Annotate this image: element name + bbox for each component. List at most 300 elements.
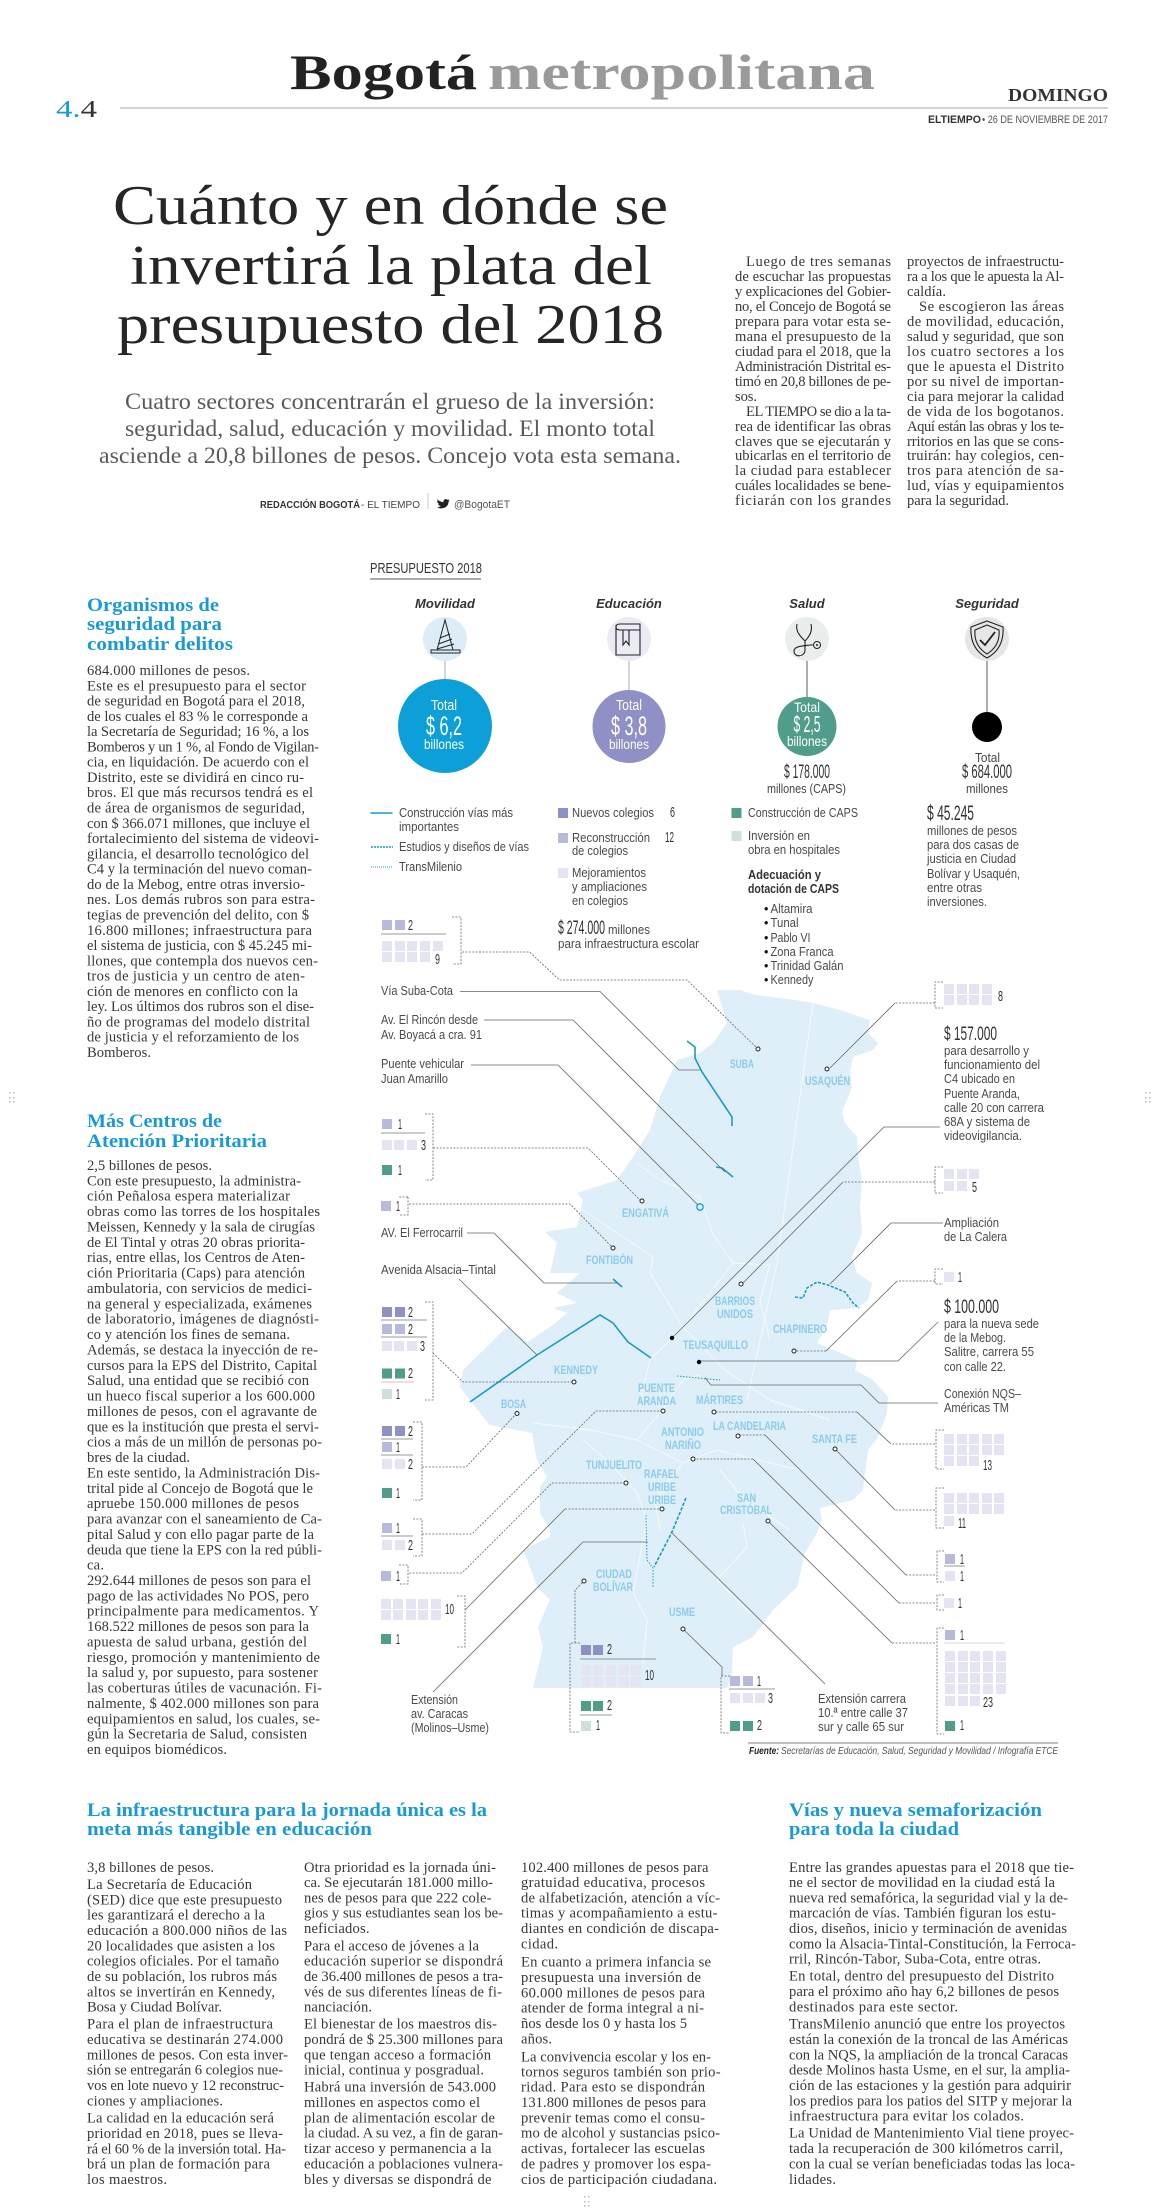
legend: educación: de colegios: [572, 844, 628, 858]
text: 1: [958, 1595, 962, 1612]
body text: apruebe 150.000 millones de pesos: [87, 1496, 299, 1512]
day label: DOMINGO: [1008, 85, 1108, 105]
callout: Usme: 1: [757, 1673, 761, 1690]
heading: Más Centros de: [87, 1111, 222, 1132]
body text: fortalecimiento del sistema de videovi-: [87, 831, 319, 847]
column 3: atender de forma integral a ni-: [521, 2001, 704, 2017]
heading: Vías y nueva semaforización: [789, 1800, 1042, 1821]
column 3: 131.800 millones de pesos para: [521, 2095, 707, 2111]
body text: rias, entre ellas, los Centros de Aten-: [87, 1250, 305, 1266]
legend: salud: [732, 806, 858, 987]
body text: co y atención los fines de semana.: [87, 1327, 290, 1343]
intro column 1: [735, 254, 892, 509]
intro column 2: salud y seguridad, que son: [907, 329, 1065, 345]
body text: Bomberos y un 1 %, al Fondo de Vigilan-: [87, 739, 319, 755]
body text: ley. Los últimos dos rubros son el dise-: [87, 999, 314, 1015]
callout: Puente Aranda: 2: [408, 1537, 413, 1554]
total bubble: $ 3,8: [611, 711, 647, 741]
column 3: prevenir temas como el consu-: [521, 2110, 705, 2126]
body text: ción Peñalosa espera materializar: [87, 1189, 290, 1205]
sector: Educación: [592, 596, 666, 763]
column 3: ños desde los 0 y hasta los 5: [521, 2016, 687, 2032]
text: 1: [958, 1269, 962, 1286]
intro column 1: sos.: [735, 389, 757, 405]
column 2: El bienestar de los maestros dis-: [304, 2017, 497, 2033]
callout: Bosa: 1: [396, 1485, 400, 1502]
source credit: Secretarías de Educación, Salud, Seguridad y Movilidad / Infografía ETCE: [781, 1746, 1058, 1757]
locality labels: CIUDAD: [596, 1569, 632, 1581]
legend: educación: Nuevos colegios: [572, 806, 654, 820]
callout: $157.000 C4: para desarrollo y: [944, 1044, 1030, 1058]
intro column 2: para la seguridad.: [907, 493, 1009, 509]
callout: Engativá: [381, 1114, 644, 1203]
CAPS list: Altamira: [770, 902, 812, 916]
intro column 1: rea de identificar las obras: [735, 419, 891, 435]
callout: Bosa: 2: [408, 1456, 413, 1473]
callout: $157.000 C4: Puente Aranda,: [944, 1087, 1020, 1101]
intro column 2: ra a los que le apuesta la Al-: [907, 269, 1064, 285]
body text: nueva red semafórica, la seguridad vial y la de-: [789, 1890, 1068, 1906]
callout: La Candelaria: 1: [960, 1551, 964, 1568]
intro column 2: rritorios en las que se cons-: [907, 434, 1064, 450]
callout: San Cristóbal: 1: [960, 1717, 964, 1734]
icon: traffic cone: [423, 617, 467, 661]
callout: Ampliación de La Calera: [830, 1216, 1007, 1284]
body text: tada la recuperación de 300 kilómetros carril,: [789, 2141, 1063, 2157]
column 2: vés de sus diferentes líneas de fi-: [304, 1984, 502, 2000]
legend: seguridad: inversiones.: [927, 895, 987, 909]
callout: San Cristóbal: [766, 1519, 1006, 1734]
callout: La Candelaria: 1: [960, 1568, 964, 1585]
callout: Kennedy: [381, 1302, 576, 1403]
column 3: 60.000 millones de pesos para: [521, 1985, 706, 2001]
legend: movilidad: [370, 806, 529, 874]
body text: obras como las torres de los hospitales: [87, 1204, 320, 1220]
locality labels: NARIÑO: [665, 1439, 701, 1452]
column 2: bles y diversas se dispondrá de: [304, 2172, 492, 2188]
callout: Barrios Unidos: 5: [972, 1179, 977, 1196]
panel: movilidad article: [789, 1800, 1076, 2188]
CAPS list: Tunal: [770, 916, 798, 930]
legend: salud: obra en hospitales: [748, 843, 840, 857]
panel: Más Centros de Atención Prioritaria: [87, 1111, 322, 1758]
locality labels: BARRIOS: [715, 1296, 755, 1308]
locality labels: [501, 1059, 857, 1619]
callout: San Cristóbal: 23: [983, 1694, 993, 1711]
callout: Usaquén: [825, 982, 1003, 1071]
body text: como la Alsacia-Tintal-Constitución, la Ferroca-: [789, 1936, 1076, 1952]
byline: [260, 493, 510, 511]
total amount: $ 684.000: [962, 762, 1012, 783]
callout: Ciudad Bolívar: 2: [607, 1641, 612, 1658]
body text: de área de organismos de seguridad,: [87, 800, 305, 816]
column 3: [521, 1860, 721, 2188]
total bubble: [398, 679, 492, 773]
callout: Extensión carrera 10: sur y calle 65 sur: [818, 1720, 904, 1734]
locality labels: USAQUÉN: [805, 1075, 850, 1088]
intro column 2: caldía.: [907, 284, 946, 300]
locality labels: URIBE: [648, 1482, 676, 1494]
callout: Engativá: 1: [398, 1162, 402, 1179]
locality labels: BOSA: [501, 1399, 526, 1411]
intro column 1: y explicaciones del Gobier-: [735, 284, 891, 300]
column 1: brá un plan de formación para: [87, 2157, 271, 2173]
CAPS amount: millones (CAPS): [767, 782, 846, 796]
locality labels: FONTIBÓN: [586, 1254, 633, 1267]
callout: Puente vehicular Juan Amarillo: Puente vehicular: [381, 1057, 464, 1071]
callout: Av. El Rincón: Av. El Rincón desde: [381, 1013, 478, 1027]
callout: Ciudad Bolívar: 2: [607, 1697, 612, 1714]
locality labels: SANTA FE: [812, 1434, 857, 1446]
column 1: 3,8 billones de pesos.: [87, 1860, 214, 1876]
panel: Organismos de seguridad: [87, 595, 319, 1061]
section title: metropolitana: [488, 44, 875, 100]
callout: San Cristóbal: 1: [960, 1627, 964, 1644]
body text: apuesta de salud urbana, gestión del: [87, 1634, 307, 1650]
legend: seguridad: millones de pesos: [927, 824, 1017, 838]
callout: $100.000 Mebog: de la Mebog.: [944, 1331, 1006, 1345]
body text: pago de las actividades No POS, pero: [87, 1588, 309, 1604]
column 2: educación superior se dispondrá: [304, 1954, 504, 1970]
column 1: altos se invertirán en Kennedy,: [87, 1984, 275, 2000]
column 3: activas, fortalecer las escuelas: [521, 2141, 705, 2157]
date line: [928, 114, 1108, 126]
locality labels: RAFAEL: [644, 1469, 679, 1481]
callout: Mártires: [712, 1410, 1004, 1474]
callout: Fontibón: [381, 1197, 615, 1250]
infrastructure amount: [558, 918, 699, 951]
heading: meta más tangible en educación: [87, 1819, 372, 1840]
icon: stethoscope: [785, 617, 829, 661]
column 2: educación a poblaciones vulnera-: [304, 2156, 503, 2172]
heading: combatir delitos: [87, 634, 233, 655]
body text: tros de justicia y un centro de aten-: [87, 969, 305, 985]
intro column 2: de movilidad, educación,: [907, 314, 1064, 330]
intro column 2: truirán: hay colegios, cen-: [907, 448, 1064, 464]
body text: 2,5 billones de pesos.: [87, 1158, 212, 1174]
locality labels: URIBE: [648, 1495, 676, 1507]
body text: con la cual se verían beneficiadas todas las loca-: [789, 2156, 1075, 2172]
infrastructure amount: para infraestructura escolar: [558, 937, 699, 951]
locality labels: PUENTE: [638, 1383, 675, 1395]
total bubble: billones: [787, 733, 827, 749]
column 3: 102.400 millones de pesos para: [521, 1860, 709, 1876]
body text: ca.: [87, 1558, 104, 1574]
legend: seguridad: justicia en Ciudad: [926, 852, 1016, 866]
total amount: Total: [975, 750, 1000, 765]
intro column 1: timó en 20,8 billones de pe-: [735, 374, 891, 390]
callout: $100.000 Mebog: Salitre, carrera 55: [944, 1345, 1034, 1359]
total amount: millones: [966, 782, 1008, 796]
intro text columns: [735, 254, 1065, 509]
callout: Rafael Uribe Uribe: 1: [396, 1631, 400, 1648]
callout: Conexión NQS-Américas TM: Conexión NQS–: [944, 1387, 1021, 1401]
callout: Ampliación de La Calera: Ampliación: [944, 1216, 999, 1230]
callout: $157.000 C4: videovigilancia.: [944, 1129, 1022, 1143]
main title: Cuánto y en dónde se: [113, 175, 668, 237]
body text: ción Prioritaria (Caps) para atención: [87, 1266, 306, 1282]
panel: budget header and sector columns: [370, 560, 1020, 796]
locality labels: ANTONIO: [661, 1427, 704, 1439]
legend: educación: y ampliaciones: [572, 880, 647, 894]
callout: $157.000 C4: [670, 1024, 1044, 1340]
body text: un hueco fiscal superior a los 600.000: [87, 1389, 315, 1405]
intro column 2: por su nivel de importan-: [907, 374, 1064, 390]
CAPS list: Pablo VI: [770, 931, 810, 945]
body text: nes. Los demás rubros son para estra-: [87, 892, 315, 908]
column 2: nanciación.: [304, 2000, 372, 2016]
locality labels: MÁRTIRES: [696, 1394, 743, 1407]
body text: destinados para este sector.: [789, 1999, 958, 2015]
total bubble: $ 6,2: [426, 711, 462, 741]
heading: Organismos de: [87, 595, 219, 616]
body text: de justicia y el reforzamiento de los: [87, 1030, 299, 1046]
total bubble: billones: [609, 736, 649, 752]
locality labels: CHAPINERO: [773, 1324, 827, 1336]
heading: [87, 1111, 268, 1152]
callout: Rafael Uribe Uribe: 10: [445, 1601, 454, 1618]
callout: Extensión av. Caracas: av. Caracas: [411, 1707, 468, 1721]
callout: Antonio Nariño: [691, 1457, 962, 1612]
callout: Tunjuelito: [381, 1481, 628, 1585]
legend: educación: Reconstrucción: [572, 831, 650, 845]
callout: Usaquén: 8: [998, 988, 1003, 1005]
intro column 2: tros para atención de sa-: [907, 463, 1064, 479]
callout: $100.000 Mebog: [697, 1297, 1039, 1374]
column 2: ca. Se ejecutarán 181.000 millo-: [304, 1875, 493, 1891]
callout: $100.000 Mebog: con calle 22.: [944, 1360, 1006, 1374]
body text: lidades.: [789, 2172, 836, 2188]
column 1: La Secretaría de Educación: [87, 1877, 253, 1893]
callout: Suba: [381, 917, 760, 1051]
callout: Mártires: 13: [983, 1457, 992, 1474]
body text: [789, 1860, 1076, 2188]
body text: cios a más de un millón de personas po-: [87, 1435, 322, 1451]
map of Bogotá: [460, 990, 888, 1688]
callout: Suba: 9: [435, 951, 440, 968]
body text: ne el sector de movilidad en la ciudad está la: [789, 1875, 1056, 1891]
CAPS list: •: [764, 973, 768, 987]
legend: seguridad: Bolívar y Usaquén,: [927, 867, 1020, 881]
body text: gún la Secretaria de Salud, consisten: [87, 1727, 308, 1743]
body text: na general y especializada, exámenes: [87, 1296, 312, 1312]
total amount: [962, 750, 1012, 796]
column 1: colegios oficiales. Por el tamaño: [87, 1954, 279, 1970]
intro column 1: ficiarán con los grandes: [735, 493, 891, 509]
body text: ño de programas del modelo distrital: [87, 1014, 310, 1030]
column 3: En cuanto a primera infancia se: [521, 1955, 711, 1971]
section title: Bogotá: [290, 44, 477, 100]
legend: educación: [558, 804, 699, 951]
intro column 2: Se escogieron las áreas: [919, 299, 1064, 315]
legend: movilidad: Construcción vías más: [399, 806, 513, 820]
legend: movilidad: TransMilenio: [399, 860, 462, 874]
legend: salud: Inversión en: [748, 829, 810, 843]
body text: en equipos biomédicos.: [87, 1742, 227, 1758]
body text: las coberturas útiles de vacunación. Fi-: [87, 1681, 322, 1697]
body text: tegias de prevención del delito, con $: [87, 908, 309, 924]
total bubble: Total: [431, 697, 457, 714]
source credit: Fuente:: [749, 1746, 779, 1757]
callout: $100.000 Mebog: $ 100.000: [944, 1297, 999, 1318]
icon: book: [607, 617, 651, 661]
CAPS list: •: [764, 916, 768, 930]
intro column 1: no, el Concejo de Bogotá se: [735, 299, 891, 315]
column 2: neficiados.: [304, 1921, 370, 1937]
column 1: 20 localidades que asisten a los: [87, 1938, 275, 1954]
body text: Meissen, Kennedy y la sala de cirugías: [87, 1220, 315, 1236]
heading: Atención Prioritaria: [87, 1131, 268, 1152]
column 2: tizar acceso y permanencia a la: [304, 2141, 492, 2157]
CAPS list: •: [764, 959, 768, 973]
callout: Tunjuelito: 1: [396, 1568, 400, 1585]
locality labels: SAN: [737, 1493, 756, 1505]
CAPS amount: $ 178.000: [784, 762, 830, 783]
CAPS list: [748, 868, 844, 987]
column 2: Otra prioridad es la jornada úni-: [304, 1860, 496, 1876]
callout: Kennedy: 1: [396, 1386, 400, 1403]
intro column 1: EL TIEMPO se dio a la ta-: [746, 404, 891, 420]
body text: nalmente, $ 402.000 millones son para: [87, 1696, 320, 1712]
column 2: Habrá una inversión de 543.000: [304, 2080, 496, 2096]
callout: Av. El Ferrocarril: [381, 1226, 617, 1283]
locality labels: CRISTÓBAL: [720, 1504, 772, 1517]
body text: infraestructura para evitar los colados.: [789, 2109, 1024, 2125]
infrastructure amount: millones: [608, 923, 650, 937]
body text: C4 y la terminación del nuevo coman-: [87, 862, 312, 878]
body text: Entre las grandes apuestas para el 2018 que tie-: [789, 1860, 1074, 1876]
locality labels: BOLÍVAR: [593, 1581, 634, 1594]
legend: educación: 12: [665, 829, 674, 846]
body text: [87, 663, 319, 1061]
column 1: [87, 1860, 288, 2188]
map land shape: [460, 990, 888, 1688]
callout: Ciudad Bolívar: 1: [596, 1717, 600, 1734]
callout: Extensión av. Caracas: Extensión: [411, 1693, 458, 1707]
intro column 2: que le apuesta el Distrito: [907, 359, 1064, 375]
callout: Bosa: 2: [408, 1423, 413, 1440]
legend: educación: en colegios: [572, 894, 628, 908]
callout: Suba: 2: [408, 917, 413, 934]
heading: para toda la ciudad: [789, 1819, 959, 1840]
callout: Chapinero: [792, 1269, 962, 1353]
body text: Con este presupuesto, la administra-: [87, 1173, 301, 1189]
column 1: Para el plan de infraestructura: [87, 2017, 274, 2033]
locality labels: ENGATIVÁ: [622, 1207, 669, 1220]
callout: $100.000 Mebog: para la nueva sede: [944, 1317, 1039, 1331]
column 2: pondrá de $ 25.300 millones para: [304, 2032, 504, 2048]
legend: seguridad: [926, 802, 1020, 909]
sector: Salud: Salud: [789, 596, 826, 611]
body text: Distrito, este se dividirá en cinco ru-: [87, 770, 304, 786]
column 2: millones en aspectos como el: [304, 2095, 480, 2111]
column 1: sión se entregarán 6 colegios nue-: [87, 2063, 283, 2079]
body text: TransMilenio anunció que entre los proyectos: [789, 2017, 1065, 2033]
callout: $157.000 C4: calle 20 con carrera: [944, 1101, 1044, 1115]
chart title: PRESUPUESTO 2018: [370, 560, 482, 577]
main title: [113, 175, 668, 356]
CAPS list: •: [764, 902, 768, 916]
body text: de laboratorio, imágenes de diagnósti-: [87, 1312, 319, 1328]
intro column 2: los cuatro sectores a los: [907, 344, 1064, 360]
subtitle: asciende a 20,8 billones de pesos. Concejo vota esta semana.: [99, 443, 681, 468]
CAPS list: •: [764, 945, 768, 959]
body text: dios, diseños, inicio y terminación de avenidas: [789, 1921, 1067, 1937]
column 3: de alfabetización, atención a víc-: [521, 1890, 720, 1906]
intro column 2: lud, vías y equipamientos: [907, 478, 1064, 494]
body text: los predios para los patios del SITP y mejorar la: [789, 2093, 1073, 2109]
intro column 1: cuáles localidades se bene-: [735, 478, 891, 494]
page number: 4. 4: [56, 97, 97, 123]
intro column 2: [907, 254, 1065, 509]
callout: Bosa: 1: [396, 1439, 400, 1456]
date line: • 26 DE NOVIEMBRE DE 2017: [982, 114, 1108, 126]
callout: Vía Suba-Cota: [381, 984, 700, 1070]
section title: [290, 44, 875, 100]
callout: Extensión carrera 10: Extensión carrera: [818, 1692, 906, 1706]
body text: La Unidad de Mantenimiento Vial tiene proyec-: [789, 2126, 1074, 2142]
body text: con la NQS, la ampliación de la troncal Caracas: [789, 2047, 1068, 2063]
body text: ción de las estaciones y la gestión para adquirir: [789, 2078, 1071, 2094]
column 3: La convivencia escolar y los en-: [521, 2049, 711, 2065]
column 2: gios y sus estudiantes sean los be-: [304, 1906, 503, 1922]
intro column 2: Aquí están las obras y los te-: [907, 419, 1064, 435]
column 2: de 36.400 millones de pesos a tra-: [304, 1969, 503, 1985]
column 3: años.: [521, 2031, 552, 2047]
callout: Puente vehicular Juan Amarillo: [381, 1057, 698, 1205]
sector: Seguridad: Seguridad: [955, 596, 1020, 611]
intro column 2: cia para mejorar la calidad: [907, 389, 1065, 405]
column 3: timas y acompañamiento a estu-: [521, 1906, 718, 1922]
intro column 1: Luego de tres semanas: [746, 254, 891, 270]
body text: equipamientos en salud, los cuales, se-: [87, 1711, 320, 1727]
callout: $157.000 C4: C4 ubicado en: [944, 1072, 1015, 1086]
intro column 1: la ciudad para establecer: [735, 463, 891, 479]
total bubble: Total: [616, 697, 642, 714]
column 3: mo de alcohol y sustancias psico-: [521, 2126, 720, 2142]
callout: Conexión NQS-Américas TM: [705, 1378, 1021, 1415]
body text: 16.800 millones; infraestructura para: [87, 923, 313, 939]
locality labels: TEUSAQUILLO: [683, 1340, 748, 1352]
column 1: prioridad en 2018, pues se lleva-: [87, 2126, 283, 2142]
callout: Ampliación de La Calera: de La Calera: [944, 1230, 1007, 1244]
legend: seguridad: entre otras: [927, 881, 982, 895]
column 1: Bosa y Ciudad Bolívar.: [87, 2000, 222, 2016]
column 1: educación a 800.000 niños de las: [87, 1923, 287, 1939]
heading: [789, 1800, 1042, 1840]
body text: [87, 1158, 322, 1758]
total bubble: [592, 690, 666, 763]
map inner roads and borders: [533, 1003, 830, 1663]
body text: Este es el presupuesto para el sector: [87, 678, 306, 694]
body text: bros. El que más recursos tendrá es el: [87, 785, 313, 801]
body text: llones, que contempla dos nuevos cen-: [87, 953, 318, 969]
source credit: [748, 1743, 1058, 1757]
callout: Engativá: 1: [398, 1116, 402, 1133]
body text: rril, Rincón-Tabor, Suba-Cota, entre otras.: [789, 1952, 1041, 1968]
locality labels: KENNEDY: [554, 1365, 598, 1377]
callout: Extensión av. Caracas: (Molinos–Usme): [411, 1721, 489, 1735]
legend: seguridad: $ 45.245: [927, 802, 974, 825]
callout: Engativá: 3: [421, 1137, 426, 1154]
column 2: plan de alimentación escolar de: [304, 2110, 495, 2126]
date line: ELTIEMPO: [928, 114, 981, 126]
body text: 292.644 millones de pesos son para el: [87, 1573, 311, 1589]
CAPS list: Zona Franca: [770, 945, 834, 959]
callout: Puente Aranda: 1: [396, 1520, 400, 1537]
CAPS list: Kennedy: [770, 973, 814, 987]
callout: Usme: 2: [757, 1717, 762, 1734]
